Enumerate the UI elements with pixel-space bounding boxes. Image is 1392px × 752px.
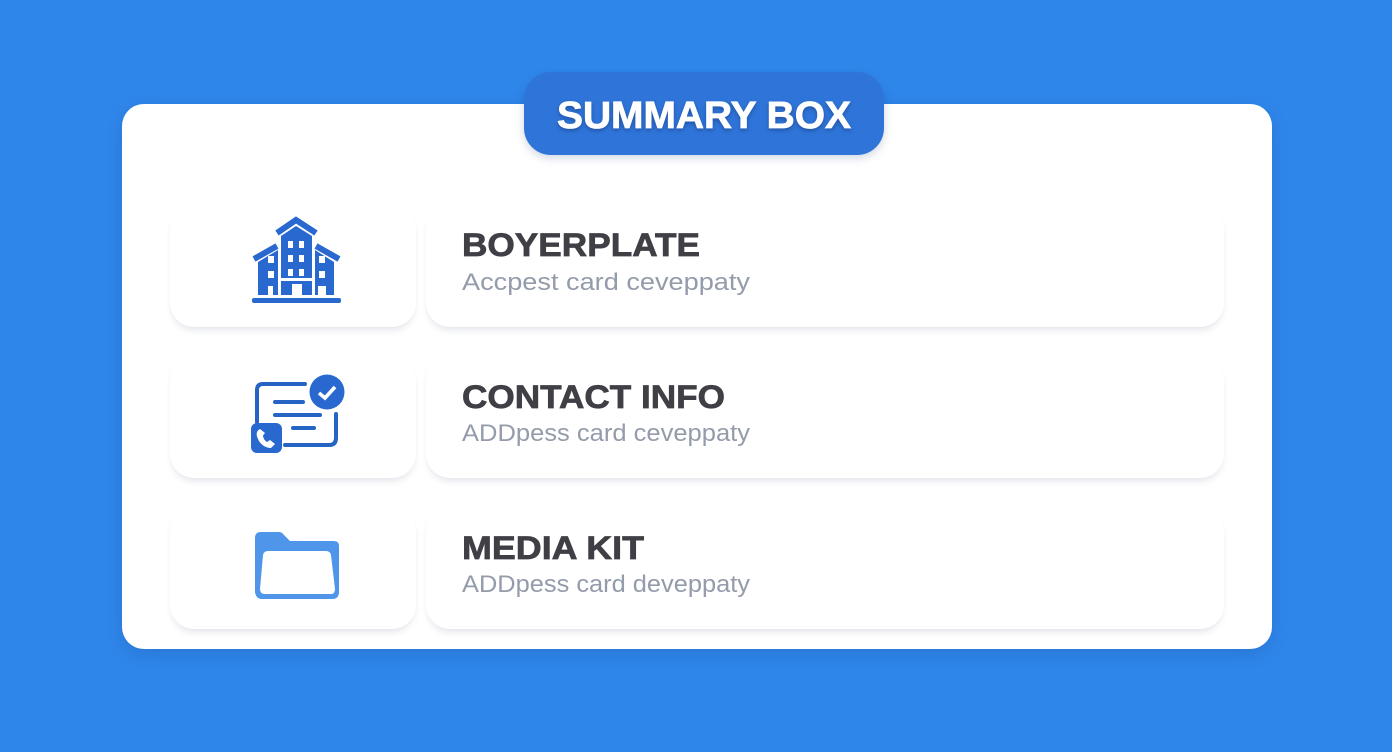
card text: contact info: CONTACT INFO <box>462 379 725 415</box>
text card: contact info <box>426 356 1224 478</box>
title: SUMMARY BOX <box>557 95 852 137</box>
card text: media kit: ADDpess card deveppaty <box>462 571 750 598</box>
icon: contact card with check and phone <box>251 374 344 453</box>
card text: boyerplate <box>462 227 750 296</box>
icon: folder <box>255 532 339 599</box>
card text: contact info <box>462 379 750 447</box>
header badge <box>524 72 884 155</box>
text card: boyerplate <box>426 205 1224 327</box>
icon card: contact <box>170 356 416 478</box>
panel: summary box <box>122 104 1272 649</box>
icon: building <box>252 216 341 303</box>
card text: media kit: MEDIA KIT <box>462 530 645 566</box>
text card: media kit <box>426 507 1224 629</box>
card text: boyerplate: BOYERPLATE <box>462 227 700 263</box>
icon card: building <box>170 205 416 327</box>
card text: boyerplate: Accpest card ceveppaty <box>462 269 750 296</box>
card text: media kit <box>462 530 750 598</box>
icon card: folder <box>170 507 416 629</box>
card text: contact info: ADDpess card ceveppaty <box>462 420 750 447</box>
